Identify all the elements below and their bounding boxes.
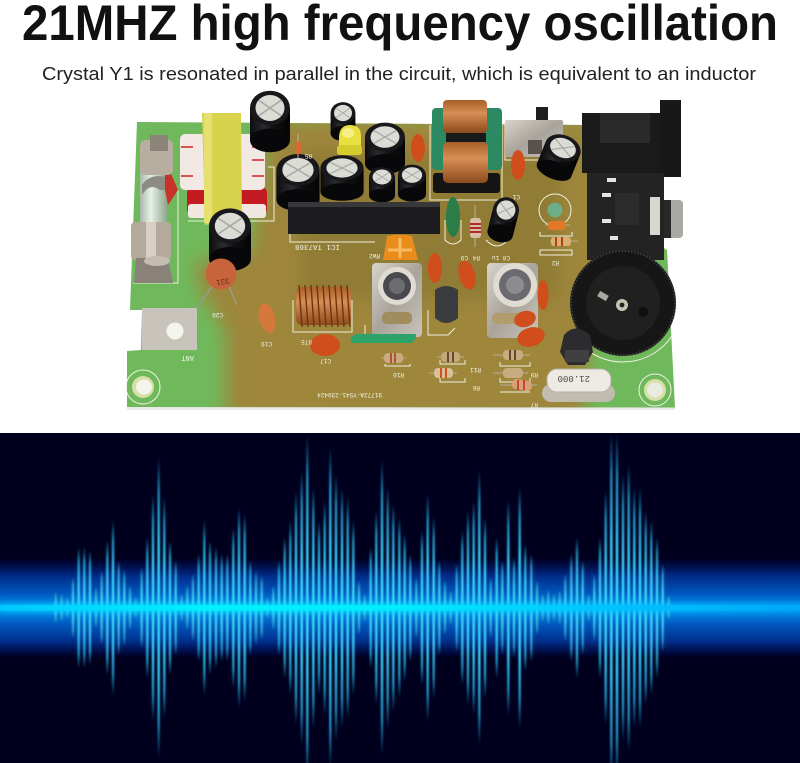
silkscreen outlines	[133, 120, 682, 392]
IF transformer cans	[372, 234, 538, 338]
crystal oscillator 21.000: 21.000	[558, 373, 590, 383]
transformer	[180, 113, 267, 225]
resistors	[295, 134, 578, 392]
silkscreen labels: C20	[212, 311, 223, 318]
silkscreen labels	[181, 152, 559, 408]
potentiometer wheel	[571, 251, 675, 355]
waveform background	[0, 433, 800, 763]
silkscreen labels: RW2	[369, 252, 380, 259]
yellow LED	[337, 125, 362, 155]
silkscreen labels: 91772A-YS41-230424	[317, 391, 382, 398]
silkscreen labels: R6	[472, 384, 480, 391]
subtitle: Crystal Y1 is resonated in parallel in the circuit, which is equivalent to an inductor	[42, 64, 756, 84]
silkscreen labels: R9	[530, 371, 538, 378]
circuit board photo illustration	[120, 91, 690, 420]
audio jack	[587, 173, 683, 260]
silkscreen labels: C8 1u	[492, 254, 510, 261]
DC power jack	[582, 100, 681, 177]
fuse	[131, 135, 178, 283]
silkscreen labels: R4	[472, 254, 480, 261]
silkscreen labels: C9	[460, 254, 468, 261]
silkscreen labels: R5	[304, 152, 312, 159]
waveform bars	[55, 433, 670, 763]
air-wound coil	[296, 285, 416, 343]
silkscreen labels: R10	[393, 371, 404, 378]
slide switch	[505, 107, 563, 157]
transistors	[435, 286, 593, 365]
mounting holes	[126, 194, 671, 406]
IC1 TA7368	[288, 202, 440, 234]
silkscreen labels: R7	[530, 401, 538, 408]
silkscreen labels: C19	[261, 340, 272, 347]
silkscreen labels: 8T5	[301, 338, 312, 345]
ceramic capacitors: 331	[215, 276, 230, 287]
panel: pcb substrate	[120, 115, 690, 420]
ceramic capacitors	[198, 134, 548, 356]
silkscreen labels: R2	[551, 259, 559, 266]
crystal oscillator 21.000	[542, 369, 615, 402]
silkscreen labels: R11	[470, 366, 481, 373]
tilted electrolytic capacitors	[485, 129, 585, 245]
central bright line	[0, 603, 800, 613]
ANT terminal	[142, 308, 197, 350]
glow band	[0, 558, 800, 658]
silkscreen labels: IC1 TA7368	[295, 242, 340, 250]
common mode choke	[432, 100, 502, 193]
electrolytic capacitors	[209, 91, 426, 271]
ground shadow	[127, 407, 675, 410]
silkscreen labels: C17	[320, 357, 331, 364]
silkscreen labels: C1	[512, 193, 520, 200]
panel: sound waveform	[0, 433, 800, 763]
silkscreen labels: ANT	[181, 353, 194, 361]
